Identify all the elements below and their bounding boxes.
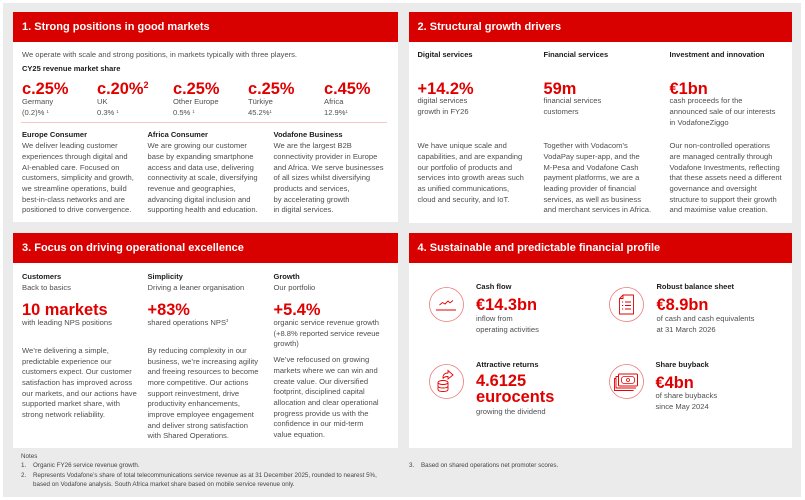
- column: Vodafone Business: products and services,: [274, 184, 349, 193]
- column: growth: growth): [274, 339, 299, 348]
- column: digital services: capabilities, and are expanding: [418, 152, 522, 161]
- column: digital services: We have unique scale and: [418, 141, 507, 150]
- description: share buyback: [656, 391, 717, 411]
- stat: Turkiye: Türkiye: [248, 97, 273, 106]
- column: investment and innovation: and maximise value creation.: [670, 205, 768, 214]
- column: growth: [274, 272, 380, 439]
- panel: strong positions in good markets: [12, 12, 398, 222]
- column: Vodafone Business: [274, 130, 384, 214]
- heading: panel 1: [12, 12, 398, 42]
- column: Europe Consumer: We deliver leading customer: [22, 141, 118, 150]
- column: financial services: Financial services: [544, 50, 608, 59]
- column: growth: (+8.8% reported service reveue: [274, 328, 380, 338]
- item: attractive returns: [429, 360, 554, 416]
- column: investment and innovation: structure to support their growth: [670, 195, 777, 204]
- column: customers: 10 markets: [22, 301, 108, 319]
- value: dividend: 4.6125: [476, 372, 526, 390]
- column: simplicity: By reducing complexity in our: [148, 346, 247, 355]
- column: Africa Consumer: advancing digital inclusion and: [148, 195, 251, 204]
- column: customers: strong network reliability.: [22, 410, 105, 419]
- column: financial services: leading provider of financial: [544, 184, 636, 193]
- column: Africa Consumer: supporting health and education.: [148, 205, 258, 214]
- column: Vodafone Business: connectivity provider in Europe: [274, 152, 377, 161]
- column: investment and innovation: Investment and innovation: [670, 50, 765, 59]
- value: dividend: eurocents: [476, 388, 554, 406]
- value: share buyback: €4bn: [656, 374, 694, 392]
- label: share buyback: Share buyback: [656, 360, 709, 369]
- footnotes: left: Notes: [21, 453, 37, 460]
- footnotes: left: [21, 453, 377, 488]
- column: simplicity: Simplicity: [148, 272, 183, 281]
- column: investment and innovation: cash proceeds for the: [670, 96, 743, 105]
- stat: Other Europe: Other Europe: [173, 97, 219, 106]
- heading: panel 2: 2. Structural growth drivers: [418, 21, 561, 33]
- column: financial services: 59m: [544, 80, 576, 98]
- stat: Germany: Germany: [22, 97, 53, 106]
- column: growth: create value. Our diversified: [274, 376, 368, 386]
- stat: UK: UK: [97, 97, 108, 106]
- column: investment and innovation: governance and oversight: [670, 184, 757, 193]
- column: financial services: Together with Vodacom’s: [544, 141, 628, 150]
- column: financial services: payment platforms, we are a: [544, 173, 639, 182]
- label: attractive returns: Attractive returns: [476, 360, 539, 369]
- heading: panel 2: [408, 12, 792, 42]
- footnotes: left: based on Vodafone analysis. South Africa market share based on mobile service revenue only.: [33, 481, 294, 488]
- stat: UK: [97, 80, 148, 117]
- column: Vodafone Business: Vodafone Business: [274, 130, 343, 139]
- footnotes: right: Based on shared operations net promoter scores.: [421, 462, 558, 469]
- heading: panel 3: 3. Focus on driving operational excellence: [22, 242, 244, 254]
- subheading: market share: CY25 revenue market share: [22, 64, 120, 73]
- icon: coins and arrow: [429, 364, 464, 399]
- column: Europe Consumer: positioned to drive convergence.: [22, 205, 131, 214]
- stat: UK: 0.3% 1: [97, 108, 119, 117]
- item: share buyback: [609, 360, 717, 411]
- column: customers: predictable experience our: [22, 356, 112, 366]
- column: customers: Customers: [22, 272, 61, 281]
- column: Africa Consumer: revenue and geographies,: [148, 184, 236, 193]
- column: simplicity: with Shared Operations.: [148, 431, 229, 440]
- column: simplicity: Driving a leaner organisation: [148, 283, 244, 292]
- column: Africa Consumer: base by expanding smartphone: [148, 152, 253, 161]
- column: Vodafone Business: of all sizes whilst diversifying: [274, 173, 370, 182]
- column: growth: Growth: [274, 272, 300, 281]
- panel: structural growth drivers: [408, 12, 792, 223]
- footnotes: left: Organic FY26 service revenue growth.: [33, 462, 140, 469]
- stat: Other Europe: c.25%: [173, 80, 219, 98]
- stat: Germany: (0.2)% 1: [22, 108, 49, 117]
- description: share buyback: since May 2024: [656, 402, 709, 411]
- item: cash flow: [429, 282, 539, 334]
- column: investment and innovation: announced sale of our interests: [670, 107, 775, 116]
- column: growth: allocation and clear operational: [274, 398, 379, 407]
- panel: operational excellence: [12, 233, 398, 448]
- column: Vodafone Business: and Africa. We serve businesses: [274, 162, 384, 172]
- icon: banknotes: [609, 364, 644, 399]
- column: simplicity: [148, 272, 259, 440]
- column: investment and innovation: Vodafone Investments, reflecting: [670, 162, 780, 172]
- stat: Turkiye: 45.2%1: [248, 108, 272, 117]
- column: financial services: customers: [544, 107, 579, 116]
- column: digital services: our portfolio of products and: [418, 162, 512, 172]
- column: Africa Consumer: We are growing our customer: [148, 141, 247, 150]
- column: Europe Consumer: Europe Consumer: [22, 130, 87, 139]
- column: Vodafone Business: by accelerating growth: [274, 195, 349, 204]
- column: digital services: [418, 50, 524, 204]
- column: financial services: [544, 50, 651, 214]
- column: Vodafone Business: We are the largest B2B: [274, 141, 352, 150]
- column: simplicity: shared operations NPS3: [148, 318, 228, 327]
- column: investment and innovation: that these assets need a different: [670, 173, 782, 182]
- stat: UK: c.20%2: [97, 80, 148, 98]
- column: financial services: and merchant services in Africa.: [544, 205, 651, 214]
- footnotes: left: 1.: [21, 462, 26, 469]
- column: investment and innovation: [670, 50, 782, 214]
- column: digital services: cloud and security, and IoT.: [418, 195, 509, 204]
- column: digital services: as unified communications,: [418, 184, 509, 193]
- column: growth: progress provide us with the: [274, 409, 368, 418]
- description: cash flow: inflow from: [476, 314, 513, 323]
- intro text: We operate with scale and strong positions, in markets typically with three players.: [22, 50, 297, 59]
- column: simplicity: +83%: [148, 301, 190, 319]
- stat: Africa: 12.9%1: [324, 108, 348, 117]
- heading: panel 4: [408, 233, 792, 263]
- heading: panel 1: 1. Strong positions in good markets: [22, 21, 210, 33]
- description: cash flow: [476, 314, 539, 334]
- stat: Turkiye: [248, 80, 294, 117]
- column: Vodafone Business: in digital services.: [274, 205, 333, 214]
- description: balance sheet: at 31 March 2026: [656, 325, 716, 334]
- stat: Germany: [22, 80, 68, 117]
- stat: Other Europe: [173, 80, 219, 117]
- column: financial services: M-Pesa and Vodafone Cash: [544, 162, 638, 172]
- column: investment and innovation: €1bn: [670, 80, 708, 98]
- column: growth: footprint, disciplined capital: [274, 387, 365, 396]
- column: growth: organic service revenue growth: [274, 318, 379, 327]
- column: Europe Consumer: customers, simplicity and growth,: [22, 173, 134, 182]
- heading: panel 4: 4. Sustainable and predictable financial profile: [418, 242, 660, 254]
- column: customers: Back to basics: [22, 283, 71, 292]
- column: financial services: services, as well as business: [544, 195, 641, 204]
- column: digital services: growth in FY26: [418, 107, 469, 116]
- value: dividend: [476, 372, 554, 406]
- column: investment and innovation: Our non-controlled operations: [670, 141, 770, 150]
- column: customers: supported market share, with: [22, 399, 120, 408]
- column: growth: We’ve refocused on growing: [274, 355, 369, 364]
- column: digital services: services into growth areas such: [418, 173, 524, 182]
- label: balance sheet: Robust balance sheet: [656, 282, 734, 291]
- icon: document: [609, 287, 644, 322]
- description: balance sheet: [656, 314, 754, 334]
- stat: Africa: c.45%: [324, 80, 370, 98]
- column: growth: Our portfolio: [274, 283, 315, 292]
- column: Europe Consumer: [22, 130, 134, 214]
- column: digital services: Digital services: [418, 50, 473, 59]
- column: financial services: VodaPay super-app, and the: [544, 152, 640, 161]
- column: customers: satisfaction has improved across: [22, 378, 132, 387]
- column: customers: [22, 272, 137, 419]
- footnotes: right: 3.: [409, 462, 414, 469]
- column: simplicity: improve employee engagement: [148, 410, 254, 419]
- footnotes: left: 2.: [21, 472, 26, 479]
- column: simplicity: business, we’re increasing agility: [148, 356, 258, 366]
- column: simplicity: and deliver strong satisfaction: [148, 421, 248, 430]
- label: cash flow: Cash flow: [476, 282, 511, 291]
- column: Europe Consumer: we streamline operations, build: [22, 184, 127, 193]
- column: Africa Consumer: Africa Consumer: [148, 130, 208, 139]
- stat: Africa: [324, 80, 370, 117]
- stat: Turkiye: c.25%: [248, 80, 294, 98]
- column: customers: our markets, and our actions have: [22, 389, 137, 398]
- column: financial services: financial services: [544, 96, 601, 105]
- column: growth: confidence in our mid-term: [274, 419, 363, 428]
- column: growth: markets where we can win and: [274, 366, 378, 375]
- column: customers: with leading NPS positions: [22, 318, 112, 327]
- value: balance sheet: €8.9bn: [656, 296, 708, 314]
- column: growth: +5.4%: [274, 301, 320, 319]
- column: digital services: +14.2%: [418, 80, 474, 98]
- column: Europe Consumer: AI-enabled care. Focused on: [22, 162, 120, 172]
- description: balance sheet: of cash and cash equivalents: [656, 314, 754, 323]
- description: share buyback: of share buybacks: [656, 391, 717, 400]
- column: Africa Consumer: [148, 130, 258, 214]
- column: simplicity: support reinvestment, drive: [148, 389, 239, 398]
- column: investment and innovation: are managed centrally through: [670, 152, 773, 161]
- column: Europe Consumer: experiences through digital and: [22, 152, 128, 161]
- column: Europe Consumer: best-in-class networks and are: [22, 195, 125, 204]
- description: dividend: growing the dividend: [476, 407, 546, 416]
- column: customers: We’re delivering a simple,: [22, 346, 109, 355]
- column: simplicity: more competitive. Our actions: [148, 378, 248, 387]
- column: Africa Consumer: connectivity at scale, diversifying: [148, 173, 258, 182]
- column: simplicity: productivity enhancements,: [148, 399, 240, 408]
- icon: cash flow chart: [429, 287, 464, 322]
- column: Africa Consumer: access and data use, delivering: [148, 162, 254, 172]
- panel: financial profile: [408, 233, 792, 448]
- column: simplicity: and freeing resources to become: [148, 367, 259, 376]
- column: growth: value equation.: [274, 430, 325, 439]
- value: cash flow: €14.3bn: [476, 296, 537, 314]
- heading: panel 3: [12, 233, 398, 263]
- column: digital services: digital services: [418, 96, 467, 105]
- description: cash flow: operating activities: [476, 325, 539, 334]
- column: customers: customers expect. Our customer: [22, 367, 132, 376]
- column: investment and innovation: in VodafoneZiggo: [670, 118, 729, 126]
- item: robust balance sheet: [609, 282, 754, 334]
- footnotes: left: Represents Vodafone’s share of total telecommunications service revenue as at 31 December 2025, rounded to nearest 5%,: [33, 472, 377, 479]
- stat: Other Europe: 0.5% 1: [173, 108, 195, 117]
- stat: Germany: c.25%: [22, 80, 68, 98]
- stat: Africa: Africa: [324, 97, 343, 106]
